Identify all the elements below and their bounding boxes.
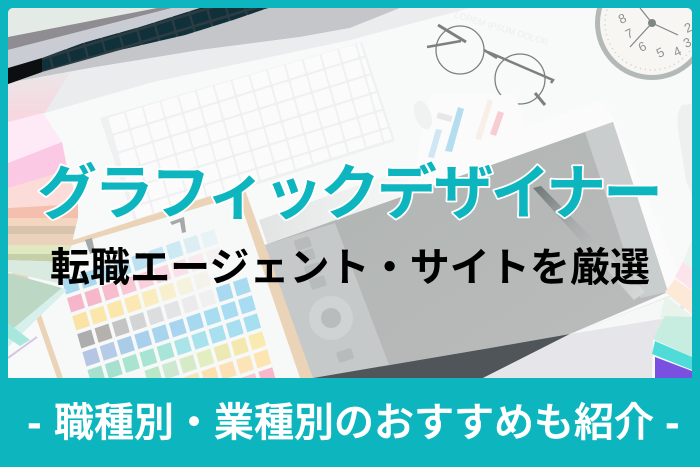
band: bottom caption: 職種別・業種別のおすすめも紹介 <box>54 401 654 445</box>
alarm clock: 4 <box>671 43 684 60</box>
monitor corner <box>8 8 470 125</box>
glasses <box>427 25 553 105</box>
band: bottom caption: - <box>27 398 42 447</box>
heading: main title: グラフィックデザイナー <box>37 160 663 227</box>
alarm clock: 3 <box>681 34 694 51</box>
alarm clock: 5 <box>654 44 667 61</box>
mouse <box>678 104 692 195</box>
alarm clock: 2 <box>682 19 695 36</box>
swatch stack right <box>652 240 692 378</box>
swatch fan left <box>8 113 78 358</box>
band: bottom caption <box>0 378 700 467</box>
bright paper highlight <box>570 288 692 334</box>
drawing tablet <box>259 122 667 378</box>
band: bottom caption: - <box>665 398 680 447</box>
stylus pen <box>533 186 645 300</box>
keyboard <box>100 42 395 223</box>
alarm clock: 6 <box>636 38 649 55</box>
faint document text: LOREM IPSUM DOLOR <box>453 9 550 48</box>
clipboard <box>4 188 313 378</box>
monitor keys <box>8 8 280 84</box>
alarm clock: 7 <box>623 25 636 42</box>
heading: subtitle: 転職エージェント・サイトを厳選 <box>50 246 650 290</box>
bar chart sheet <box>428 95 518 158</box>
white paper curl <box>483 296 684 378</box>
desk surface <box>8 8 692 378</box>
dark shadow wedge <box>313 334 570 378</box>
panel: desk photo <box>8 8 692 378</box>
alarm clock <box>595 8 692 80</box>
colour chips <box>62 230 276 378</box>
alarm clock: 8 <box>616 10 629 27</box>
